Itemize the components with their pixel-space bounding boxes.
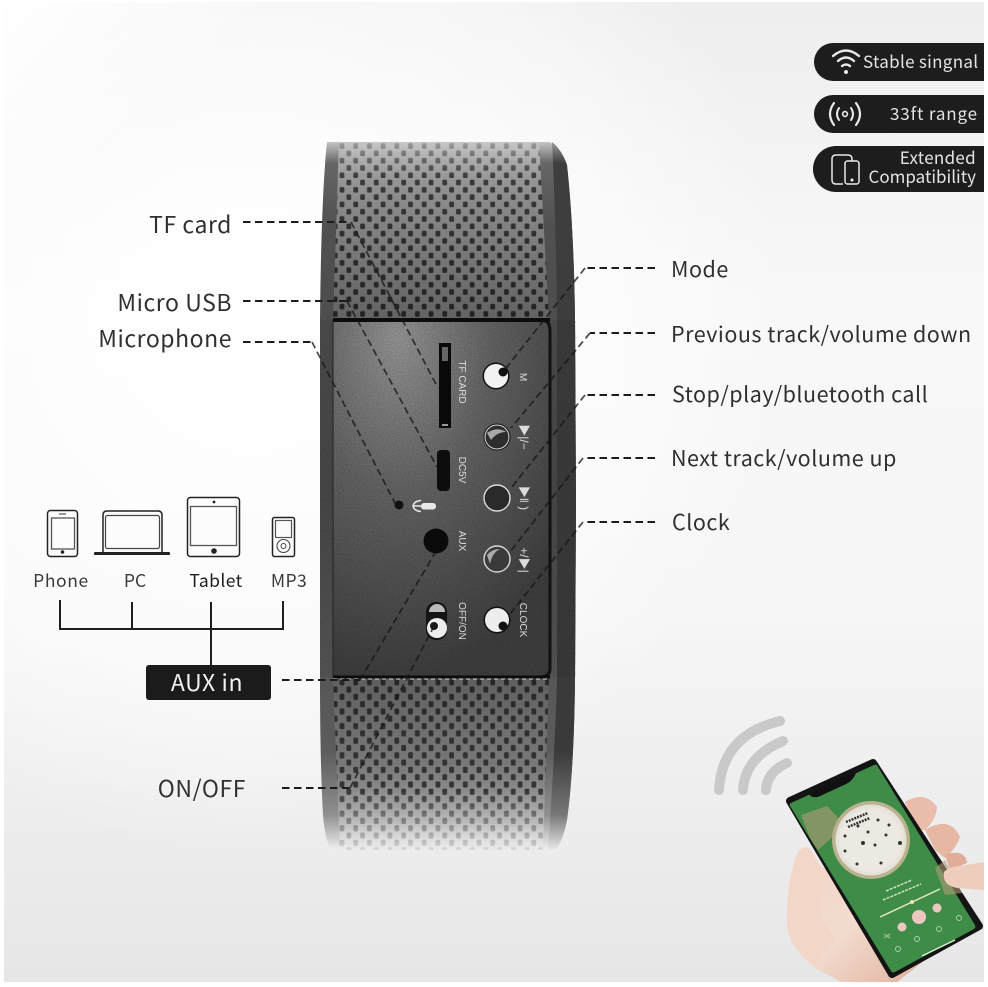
right labels: Stop/play/bluetooth call	[672, 378, 928, 409]
panel printed labels: OFF/ON	[456, 602, 467, 640]
leaf decoration	[801, 806, 962, 895]
icon: devices	[832, 155, 859, 184]
feature pill: range	[814, 95, 984, 133]
left labels	[98, 206, 246, 804]
feature pill: range: 33ft range	[890, 100, 978, 125]
control panel	[320, 320, 576, 679]
progress bar	[880, 889, 940, 917]
device diagram	[33, 498, 307, 700]
microphone glyph	[413, 500, 436, 512]
bottom app icons	[884, 916, 962, 952]
upper speaker grille	[333, 142, 549, 320]
album disc	[832, 801, 910, 879]
lower speaker grille	[333, 677, 549, 850]
speaker body	[320, 142, 576, 850]
speaker housing	[320, 142, 576, 850]
right labels	[671, 253, 972, 537]
device labels: Tablet	[189, 568, 243, 593]
playback buttons	[898, 904, 942, 932]
right labels: Previous track/volume down	[671, 318, 972, 349]
feature pill: stable signal	[814, 43, 984, 81]
device labels	[33, 568, 307, 593]
panel printed labels	[456, 360, 531, 640]
left labels: ON/OFF	[158, 770, 246, 804]
icon: wifi	[833, 50, 859, 74]
button: clock	[484, 606, 510, 634]
icon: mp3 player	[272, 518, 294, 556]
feature pill: compatibility	[813, 144, 984, 192]
left labels: TF card	[149, 206, 232, 240]
right labels: Clock	[672, 506, 730, 537]
AUX in label	[146, 664, 271, 700]
hand holding phone	[787, 763, 984, 982]
micro USB port	[437, 450, 450, 491]
connector lines	[60, 600, 283, 665]
phone screen	[790, 765, 975, 972]
wireless signal arcs	[719, 721, 787, 790]
icon: phone	[48, 510, 78, 556]
button: previous	[484, 424, 510, 450]
TF card slot	[439, 343, 451, 428]
panel printed labels: AUX	[456, 531, 467, 552]
palm and fingers behind phone	[787, 797, 967, 982]
overlapping finger	[944, 862, 984, 890]
microphone hole	[394, 500, 404, 510]
home indicator	[922, 940, 955, 956]
AUX jack	[424, 528, 448, 554]
feature pill: compatibility: Compatibility	[868, 163, 976, 188]
button: stop and play	[484, 485, 510, 511]
leader lines	[243, 222, 655, 788]
panel printed labels: ▶|/−	[517, 424, 531, 450]
feature pill: stable signal: Stable singnal	[863, 48, 978, 73]
icon: laptop	[94, 511, 170, 555]
panel printed labels: CLOCK	[517, 603, 528, 638]
right labels: Mode	[671, 253, 729, 284]
panel printed labels: TF CARD	[456, 360, 467, 404]
panel printed labels: DC5V	[456, 457, 467, 484]
panel printed labels: ▶‖ )	[517, 486, 531, 510]
phone	[790, 763, 979, 974]
AUX in label: AUX in	[171, 664, 243, 698]
button: next	[484, 546, 510, 572]
song caption	[883, 880, 921, 900]
phone notch	[810, 773, 855, 796]
thumb	[787, 847, 835, 965]
right rim	[548, 142, 576, 850]
device labels: Phone	[33, 568, 89, 593]
left labels: Micro USB	[117, 284, 232, 318]
feature pill: compatibility: Extended	[900, 144, 976, 169]
device labels: PC	[124, 568, 146, 593]
button: mode	[482, 362, 510, 390]
panel printed labels: +/▶|	[517, 547, 531, 573]
icon: signal waves	[830, 103, 860, 125]
left labels: Microphone	[98, 320, 232, 354]
right labels: Next track/volume up	[671, 442, 897, 473]
device labels: MP3	[271, 568, 307, 593]
panel printed labels: M	[517, 373, 528, 381]
icon: tablet	[188, 498, 240, 556]
power switch	[426, 602, 447, 640]
